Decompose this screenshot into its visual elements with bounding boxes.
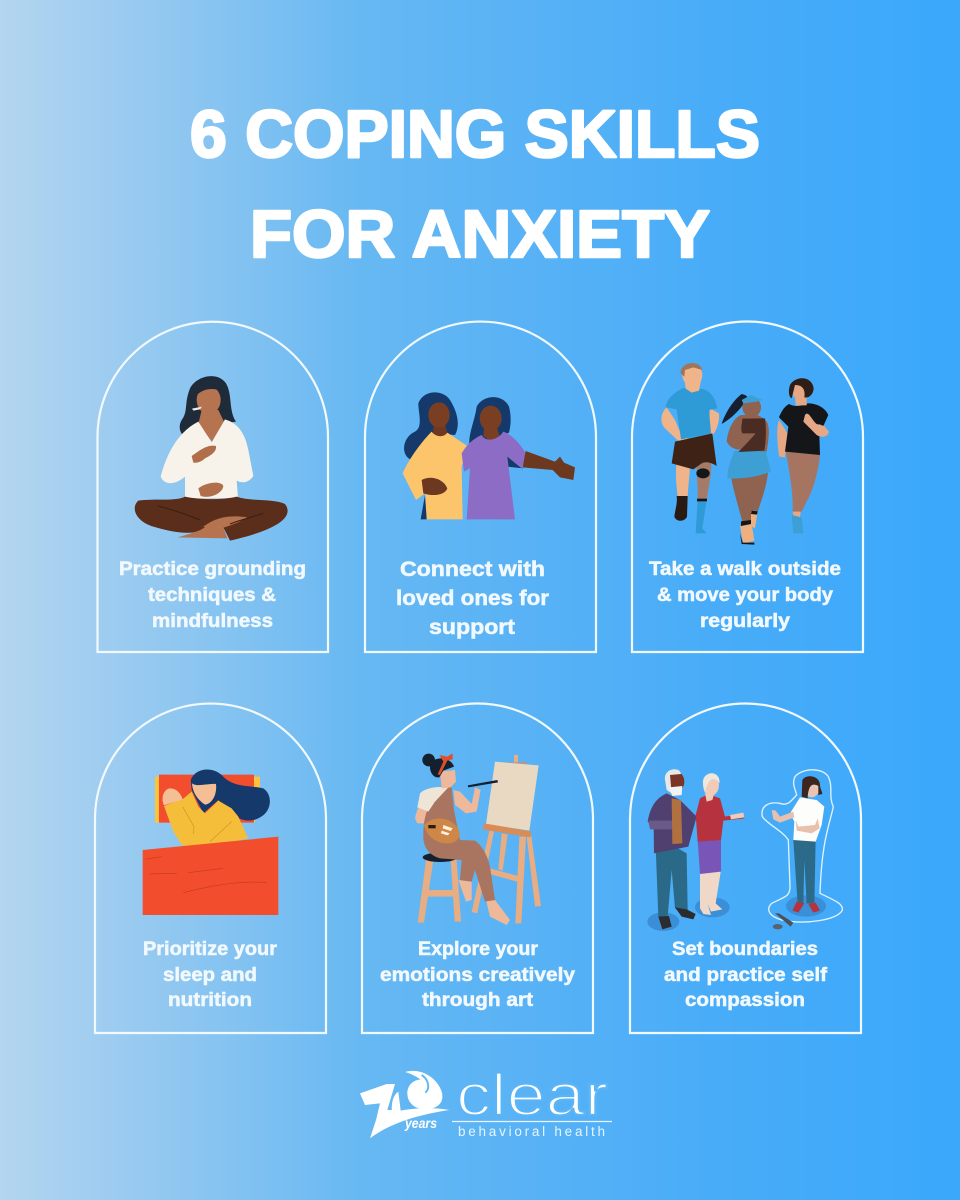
icon: meditating woman [135,376,288,541]
panel: connect with loved ones: support [429,616,515,639]
label: Connect with [400,558,545,581]
icon: two women embracing [403,392,575,519]
panel: boundaries and self compassion: compassion [685,989,805,1011]
title: 6 COPING SKILLS [190,97,760,172]
panel: sleep and nutrition [95,704,326,1033]
title: FOR ANXIETY [250,197,710,272]
panel: walk and move: regularly [700,610,790,632]
panel: grounding and mindfulness: mindfulness [152,610,273,632]
label: Explore your [418,938,538,960]
label: Take a walk outside [649,558,841,580]
panel: creative art: emotions creatively [380,964,575,986]
icon: 10 years mark [360,1071,449,1138]
panel: grounding and mindfulness [98,322,328,652]
label: Set boundaries [672,938,818,960]
panel: creative art: through art [422,989,534,1011]
panel: grounding and mindfulness: techniques & [148,584,276,606]
panel: boundaries and self compassion [630,704,861,1033]
icon: sleeping woman [143,770,278,915]
panel: sleep and nutrition: nutrition [168,989,252,1011]
panel: walk and move [632,322,863,652]
logo: clear behavioral health [360,1063,612,1139]
panel: boundaries and self compassion: and practice self [664,964,828,986]
icon: three people walking [661,363,829,545]
panel: creative art [362,704,593,1033]
logo: clear behavioral health: clear [456,1063,608,1128]
panel: walk and move: & move your body [657,584,833,606]
icon: painter at easel [415,753,541,925]
icon: couple and woman inside boundary line [647,769,842,931]
panel: sleep and nutrition: sleep and [163,964,257,986]
panel: connect with loved ones [365,322,596,652]
panel: connect with loved ones: loved ones for [396,587,549,610]
logo: clear behavioral health: behavioral health [458,1124,605,1139]
label: Practice grounding [119,558,306,580]
logo: clear behavioral health: years [404,1115,437,1131]
label: Prioritize your [143,938,277,960]
title [190,97,760,272]
